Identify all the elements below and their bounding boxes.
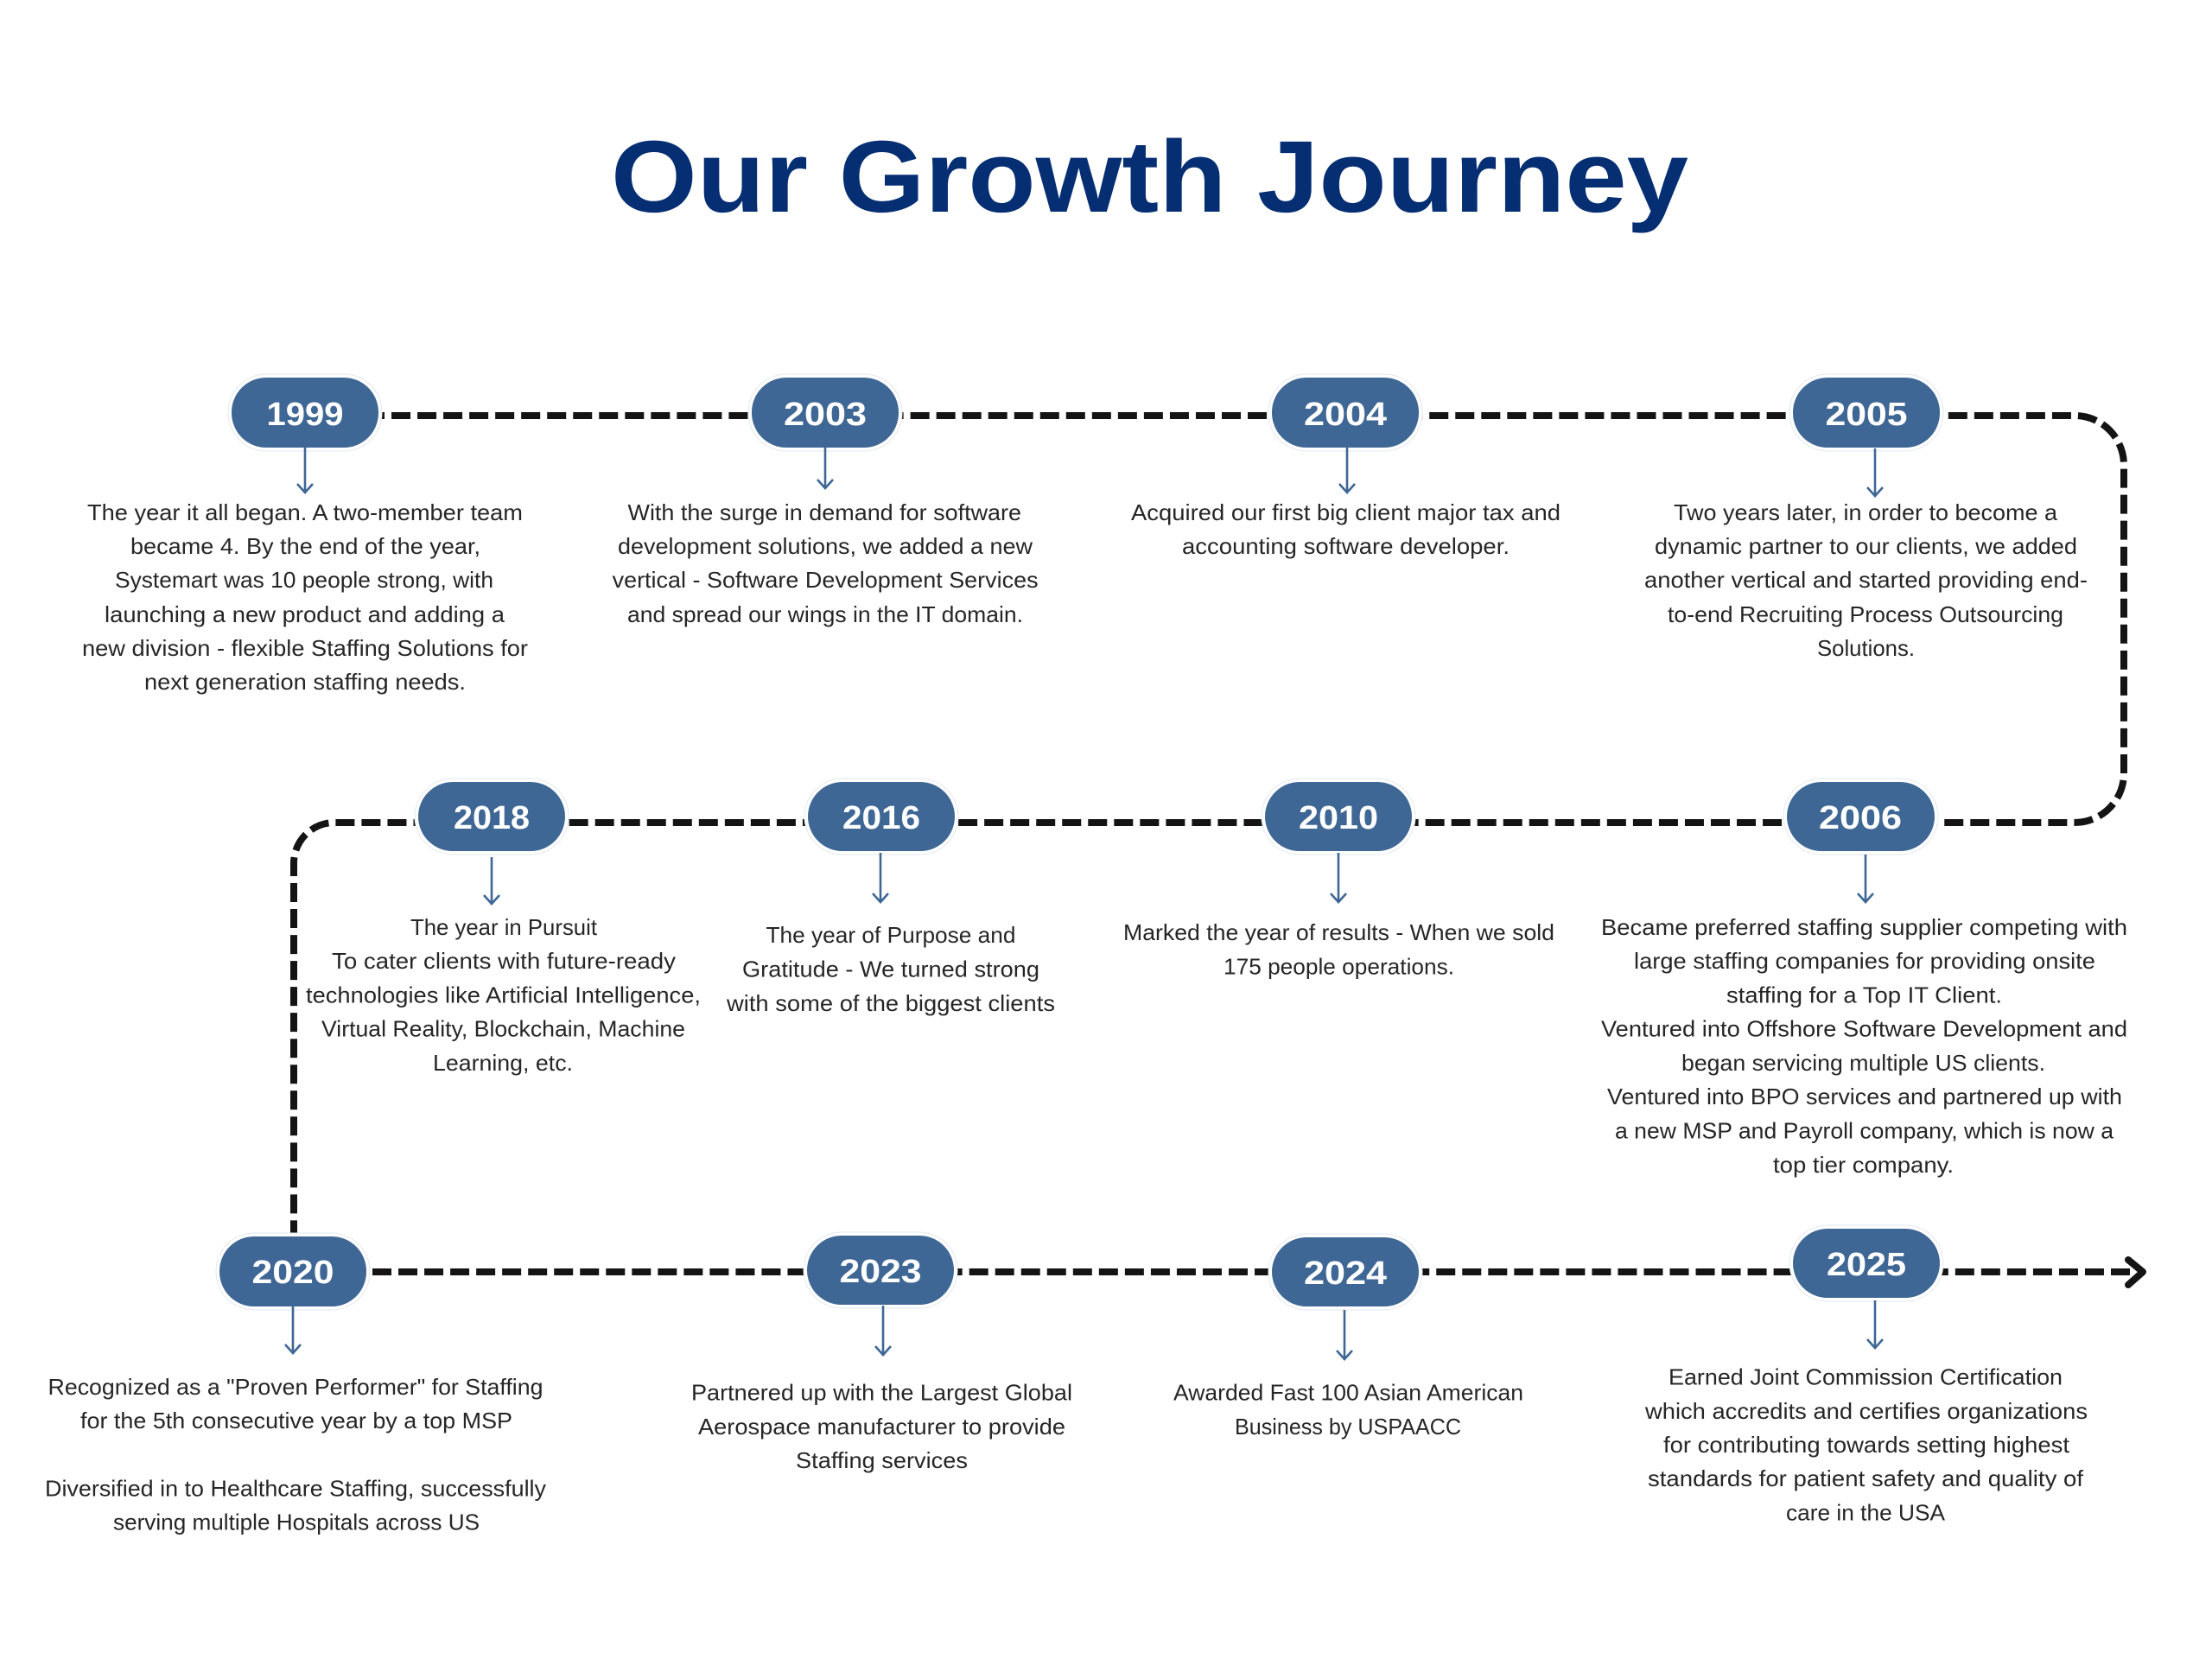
year pill 2003: 2003 (784, 397, 867, 433)
year pill 2016 (804, 779, 958, 855)
year pill 2023: 2023 (840, 1254, 921, 1290)
year pill 2010 (1262, 779, 1415, 855)
arrow 1999 (297, 448, 313, 493)
text 2005: to-end Recruiting Process Outsourcing (1668, 601, 2063, 627)
year pill 2003 (748, 374, 902, 451)
text 2006: staffing for a Top IT Client. (1726, 982, 2002, 1007)
text 1999 (82, 499, 528, 695)
milestone 2005 (1644, 374, 2088, 661)
text 2004: Acquired our first big client major tax and (1131, 499, 1560, 525)
arrow 2004 (1339, 448, 1355, 493)
year pill 2006: 2006 (1819, 800, 1902, 836)
text 2018 (306, 914, 701, 1076)
milestone 2006 (1601, 779, 2127, 1178)
text 2006 (1601, 914, 2127, 1178)
text 2005: Two years later, in order to become a (1674, 499, 2058, 525)
text 2020: for the 5th consecutive year by a top MSP (80, 1408, 512, 1433)
text 2006: Ventured into BPO services and partnered up with (1607, 1084, 2122, 1109)
text 2010: Marked the year of results - When we sold (1123, 919, 1554, 945)
arrow 2018 (484, 857, 499, 904)
text 2023: Staffing services (796, 1447, 968, 1473)
text 2025: care in the USA (1786, 1500, 1946, 1526)
text 1999: launching a new product and adding a (105, 601, 505, 627)
text 2018: Learning, etc. (433, 1050, 573, 1076)
year pill 2020 (216, 1233, 370, 1310)
text 2005 (1644, 499, 2088, 661)
text 2005: another vertical and started providing end- (1644, 567, 2088, 593)
text 2016: Gratitude - We turned strong (742, 957, 1039, 982)
text 2020 (45, 1374, 546, 1535)
text 2025: standards for patient safety and quality of (1648, 1465, 2084, 1491)
text 2006: began servicing multiple US clients. (1681, 1050, 2045, 1076)
milestone 2010 (1123, 779, 1554, 980)
text 2006: top tier company. (1773, 1152, 1954, 1178)
text 2010: 175 people operations. (1224, 954, 1454, 980)
title: Our Growth Journey (611, 120, 1688, 234)
milestone 2024 (1173, 1234, 1523, 1440)
text 2006: a new MSP and Payroll company, which is now a (1615, 1118, 2114, 1144)
text 2020: serving multiple Hospitals across US (113, 1510, 480, 1535)
milestone 1999 (82, 374, 528, 695)
text 2016: with some of the biggest clients (726, 990, 1055, 1016)
text 2023: Partnered up with the Largest Global (691, 1379, 1072, 1405)
arrow 2010 (1331, 853, 1346, 902)
year pill 2025 (1789, 1225, 1943, 1301)
text 2003: vertical - Software Development Services (613, 567, 1039, 593)
milestone 2025 (1644, 1225, 2088, 1526)
text 2020: Diversified in to Healthcare Staffing, successfully (45, 1476, 546, 1502)
text 2016 (726, 922, 1055, 1016)
year pill 1999 (228, 374, 382, 451)
arrow 2020 (285, 1306, 301, 1353)
text 2003: and spread our wings in the IT domain. (627, 601, 1023, 627)
text 2004 (1131, 499, 1560, 559)
text 1999: next generation staffing needs. (144, 669, 466, 695)
dashed timeline path: rows 1 and 2 (294, 416, 2124, 1236)
text 2018: Virtual Reality, Blockchain, Machine (321, 1016, 685, 1042)
milestone 2004 (1131, 374, 1560, 559)
text 2005: dynamic partner to our clients, we added (1655, 533, 2077, 559)
text 2018: The year in Pursuit (410, 914, 598, 940)
milestone 2018 (306, 779, 701, 1076)
year pill 2005 (1789, 374, 1943, 451)
text 2023 (691, 1379, 1072, 1473)
text 2025: for contributing towards setting highest (1663, 1432, 2070, 1458)
milestone 2003 (613, 374, 1039, 627)
arrow 2006 (1858, 855, 1873, 902)
arrow 2016 (873, 853, 888, 902)
milestone 2023 (691, 1232, 1072, 1473)
year pill 2006 (1783, 779, 1938, 855)
year pill 2005: 2005 (1825, 397, 1908, 433)
text 2018: To cater clients with future-ready (332, 948, 676, 974)
text 2024: Awarded Fast 100 Asian American (1173, 1379, 1523, 1405)
year pill 2018: 2018 (454, 800, 530, 836)
year pill 2020: 2020 (252, 1255, 334, 1291)
milestone 2016 (726, 779, 1055, 1016)
year pill 2016: 2016 (842, 800, 920, 836)
text 2010 (1123, 919, 1554, 980)
arrow 2023 (875, 1306, 891, 1355)
text 2003: development solutions, we added a new (618, 533, 1033, 559)
text 2025: Earned Joint Commission Certification (1669, 1363, 2063, 1389)
arrow 2025 (1867, 1300, 1883, 1348)
text 2006: Ventured into Offshore Software Development and (1601, 1016, 2127, 1042)
year pill 2004: 2004 (1304, 397, 1387, 433)
arrow head (2128, 1260, 2143, 1285)
milestone 2020 (45, 1233, 546, 1535)
year pill 2024 (1268, 1234, 1422, 1310)
year pill 2004 (1268, 374, 1422, 451)
text 2006: Became preferred staffing supplier competing with (1601, 914, 2127, 940)
arrow 2005 (1867, 448, 1883, 496)
arrow 2003 (817, 448, 833, 488)
text 2016: The year of Purpose and (766, 922, 1016, 948)
dashed timeline path: row 3 (372, 1268, 2134, 1275)
text 2003: With the surge in demand for software (627, 499, 1021, 525)
text 2003 (613, 499, 1039, 627)
year pill 2024: 2024 (1304, 1255, 1387, 1292)
text 1999: Systemart was 10 people strong, with (115, 567, 493, 593)
text 2020: Recognized as a "Proven Performer" for Staffing (48, 1374, 543, 1400)
year pill 2023 (804, 1232, 957, 1308)
text 2004: accounting software developer. (1182, 533, 1510, 559)
year pill 1999: 1999 (266, 397, 344, 433)
text 2025: which accredits and certifies organizations (1644, 1398, 2088, 1424)
text 2005: Solutions. (1817, 635, 1915, 661)
text 2018: technologies like Artificial Intelligence, (306, 982, 701, 1007)
year pill 2025: 2025 (1827, 1247, 1906, 1283)
text 2024: Business by USPAACC (1235, 1414, 1461, 1440)
arrow 2024 (1337, 1310, 1352, 1359)
text 2024 (1173, 1379, 1523, 1440)
text 1999: became 4. By the end of the year, (130, 533, 480, 559)
text 1999: The year it all began. A two-member team (87, 499, 523, 525)
text 2023: Aerospace manufacturer to provide (698, 1414, 1065, 1440)
text 1999: new division - flexible Staffing Solutions for (82, 635, 528, 661)
year pill 2018 (415, 779, 569, 855)
year pill 2010: 2010 (1299, 800, 1378, 836)
text 2006: large staffing companies for providing onsite (1634, 948, 2095, 974)
text 2025 (1644, 1363, 2088, 1526)
